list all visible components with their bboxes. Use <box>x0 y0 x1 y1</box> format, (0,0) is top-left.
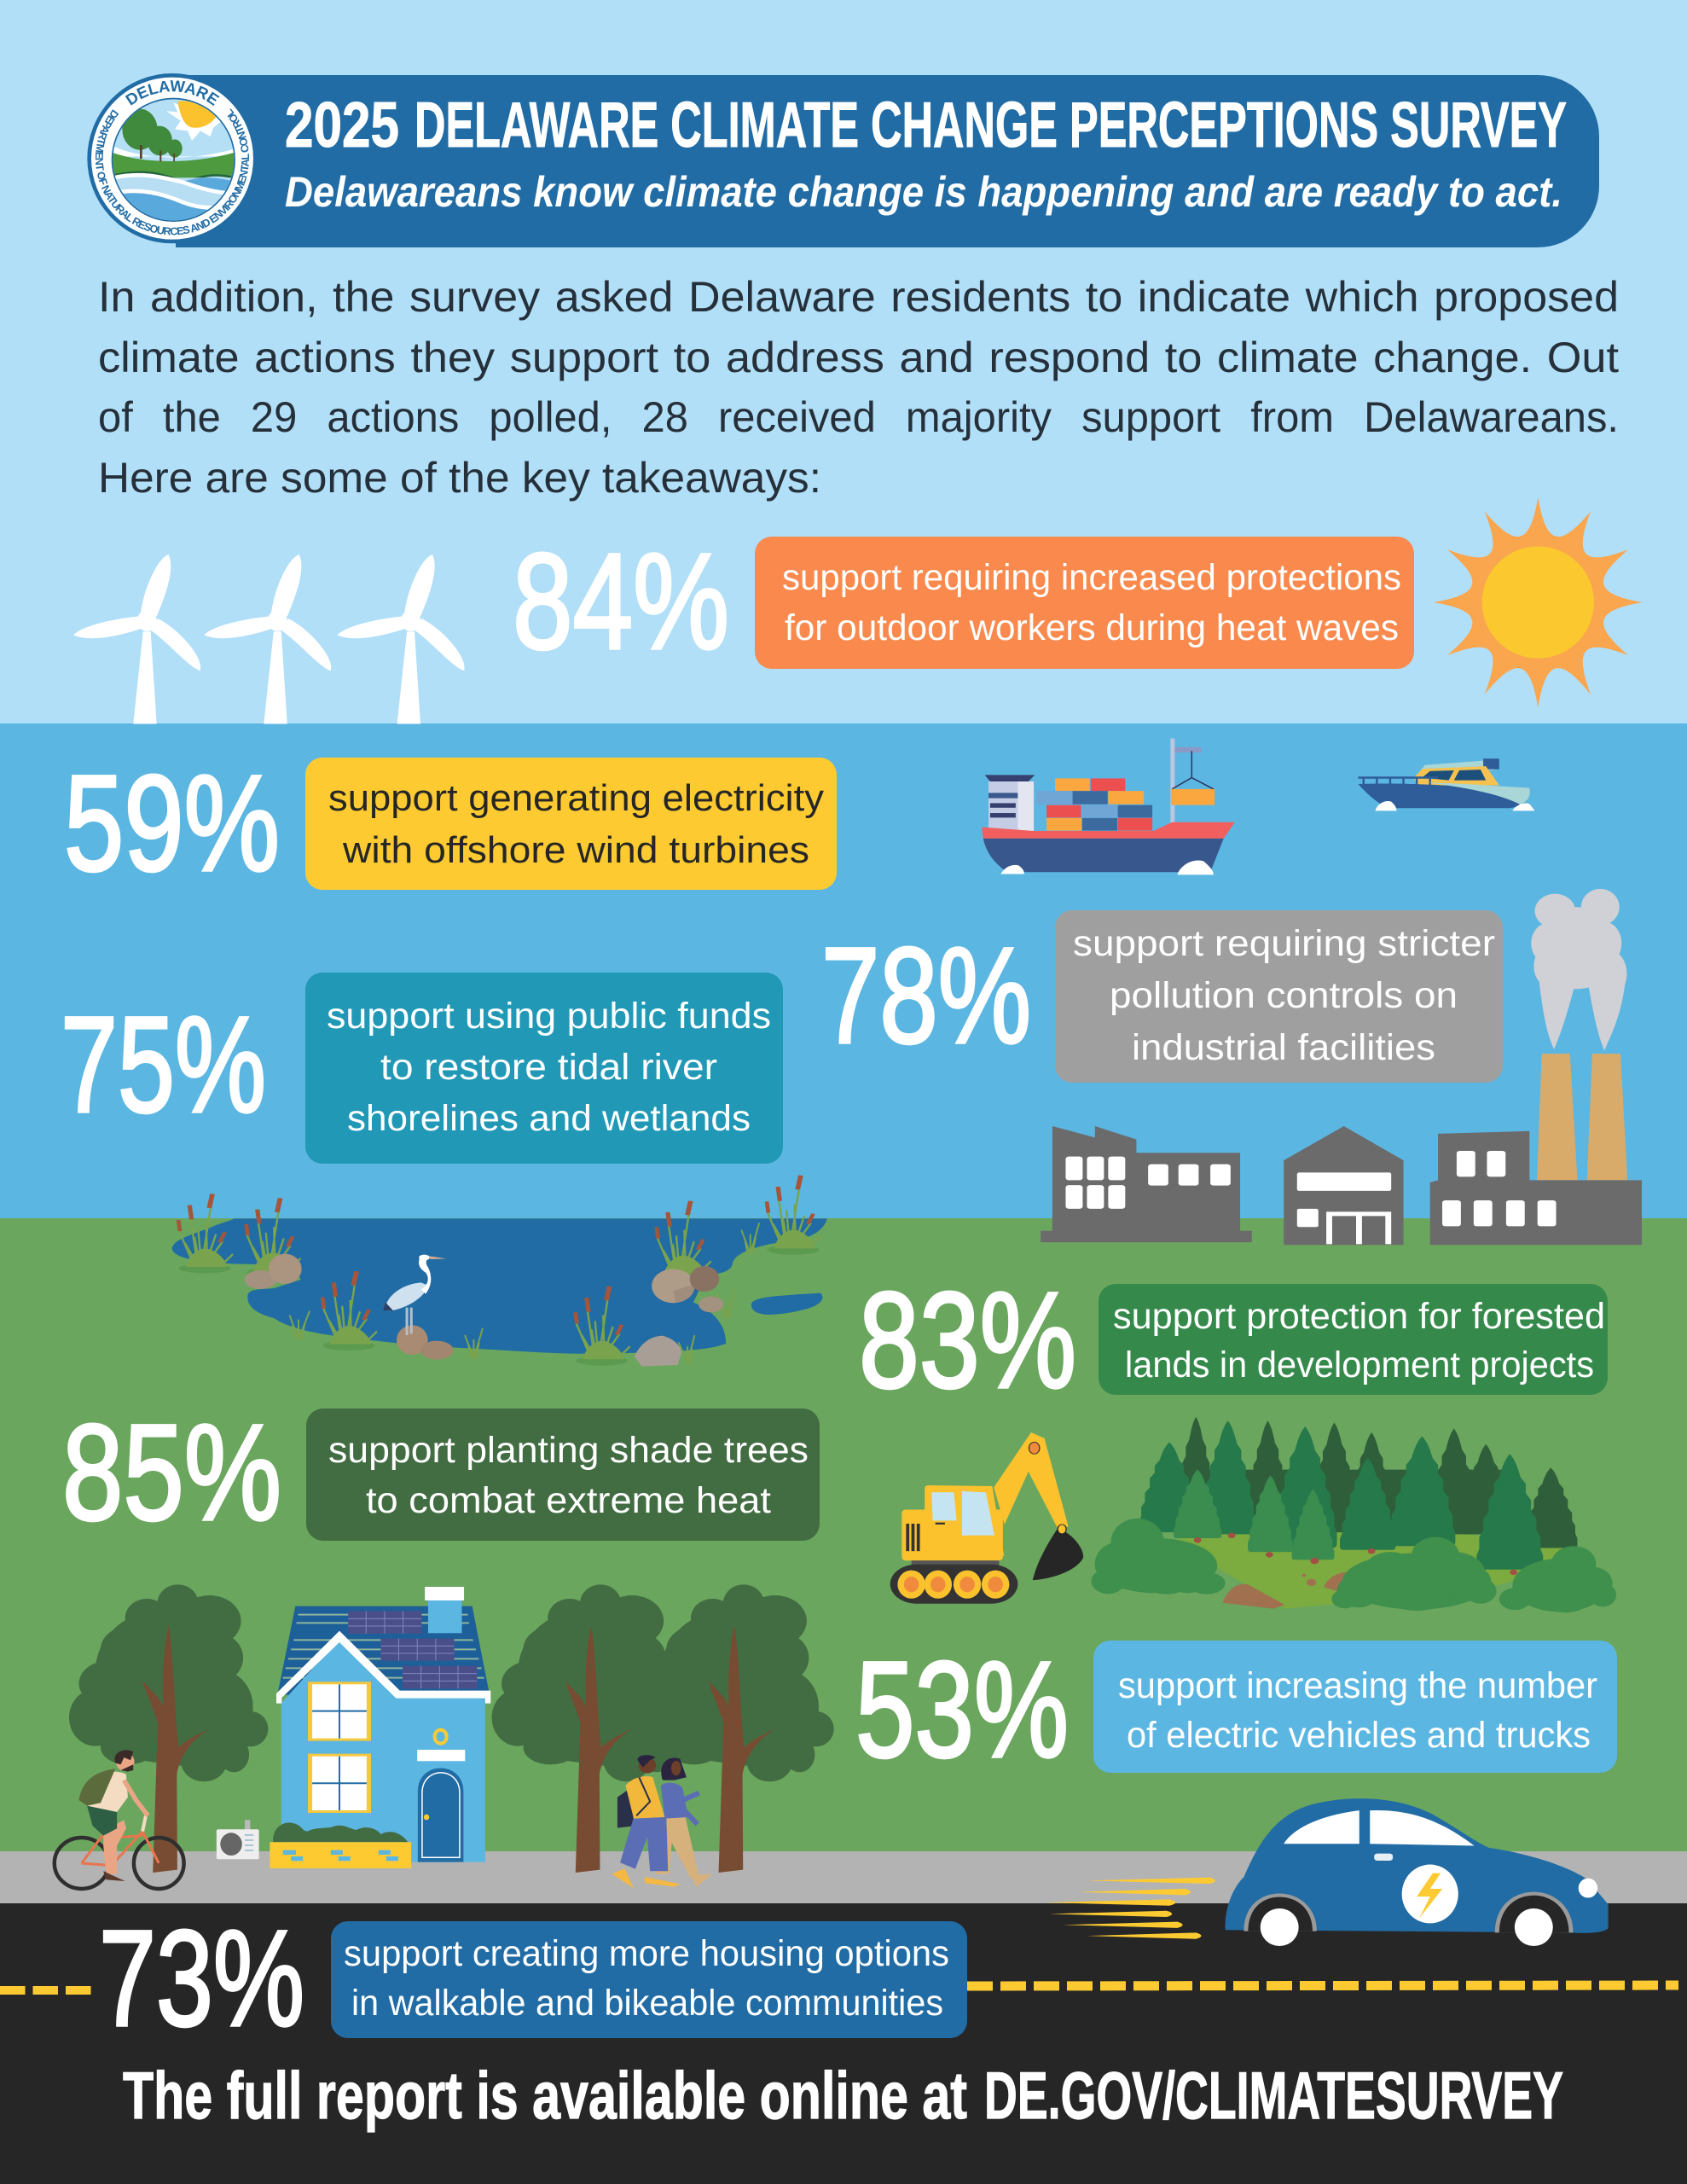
callout: forested lands <box>1099 1284 1608 1395</box>
icon: electric car with speed lines <box>1045 1798 1609 1946</box>
background: sidewalk band <box>0 1851 1687 1904</box>
windows <box>308 1682 371 1813</box>
background: grass band <box>0 1218 1687 1852</box>
solar panels <box>348 1611 477 1688</box>
stat: 84%: 84% <box>513 525 729 677</box>
illustration: house with solar panels <box>270 1587 490 1868</box>
callout: electric vehicles: support increasing the number <box>1118 1665 1597 1706</box>
clearing <box>1172 1530 1571 1609</box>
walls <box>281 1640 485 1862</box>
callout: offshore wind: with offshore wind turbines <box>342 829 809 871</box>
icon: wind turbines <box>73 555 465 723</box>
callout: tidal shorelines <box>305 973 783 1164</box>
shrubs <box>1091 1519 1616 1612</box>
intro paragraph: of the 29 actions polled, 28 received majority support from Delawareans. <box>98 393 1619 441</box>
icon: sun <box>1434 497 1643 707</box>
woman <box>656 1757 713 1887</box>
factory building left <box>1041 1126 1252 1242</box>
callout: pollution controls: pollution controls on <box>1110 975 1458 1016</box>
chimney <box>425 1587 464 1633</box>
callout: shade trees: to combat extreme heat <box>366 1480 771 1521</box>
footer call to action: The full report is available online at <box>123 2058 967 2133</box>
icon: factories with smokestacks <box>1041 889 1642 1245</box>
roof <box>277 1606 490 1695</box>
small grass tufts <box>290 1223 759 1364</box>
subtitle: Delawareans know climate change is happening and are ready to act. <box>285 168 1562 216</box>
icon: excavator <box>890 1432 1083 1604</box>
mid conifers <box>1139 1420 1543 1570</box>
background: sky band <box>0 0 1687 724</box>
stat: 53%: 53% <box>855 1633 1069 1786</box>
illustration: couple walking <box>612 1755 713 1888</box>
back conifers <box>1174 1417 1577 1548</box>
stat: 75%: 75% <box>61 988 266 1141</box>
callout: electric vehicles: of electric vehicles and trucks <box>1127 1715 1591 1756</box>
stat: 73%: 73% <box>99 1902 304 2054</box>
white trim <box>276 1631 490 1704</box>
man <box>612 1755 680 1888</box>
callout: walkable housing: in walkable and bikeable communities <box>351 1983 943 2024</box>
callout: forested lands: support protection for forested <box>1113 1296 1605 1337</box>
logo: DNREC seal: DELAWARE <box>125 80 220 106</box>
illustration: trees <box>69 1584 834 1873</box>
charge badge <box>1402 1865 1458 1923</box>
intro paragraph: climate actions they support to address and respond to climate change. Out <box>98 334 1619 381</box>
car windows <box>1284 1810 1474 1845</box>
callout: outdoor workers: support requiring increased protections <box>782 557 1401 598</box>
stat: 78%: 78% <box>821 919 1031 1072</box>
illustration: forest <box>1091 1417 1616 1612</box>
stat: 59%: 59% <box>64 746 280 899</box>
rocks <box>245 1254 723 1367</box>
callout: walkable housing <box>331 1921 967 2038</box>
pond water <box>172 1218 827 1354</box>
callout: pollution controls: support requiring stricter <box>1073 923 1495 964</box>
icon: heat pump unit <box>217 1820 259 1859</box>
callout: tidal shorelines: shorelines and wetlands <box>347 1098 751 1139</box>
front conifers <box>1174 1470 1334 1560</box>
planter <box>270 1822 411 1868</box>
smokestacks <box>1537 1054 1627 1180</box>
callout: offshore wind: support generating electricity <box>328 777 824 819</box>
road lane markings <box>0 1985 1678 1990</box>
reed clusters <box>177 1176 821 1366</box>
intro paragraph: In addition, the survey asked Delaware residents to indicate which proposed <box>98 273 1619 321</box>
icon: container ship <box>982 739 1235 874</box>
header banner <box>176 75 1599 247</box>
callout: outdoor workers <box>755 537 1414 669</box>
callout: walkable housing: support creating more housing options <box>344 1933 949 1974</box>
callout: pollution controls: industrial facilities <box>1132 1027 1435 1068</box>
heron <box>383 1255 447 1335</box>
car body <box>1225 1798 1609 1933</box>
stat: 83%: 83% <box>859 1263 1076 1416</box>
callout: forested lands: lands in development projects <box>1125 1345 1594 1385</box>
background: road band <box>0 1903 1687 2184</box>
callout: offshore wind <box>305 758 837 890</box>
warehouse middle <box>1284 1126 1404 1245</box>
callout: tidal shorelines: to restore tidal river <box>380 1047 717 1088</box>
logo: DNREC seal: DEPARTMENT OF NATURAL RESOURCES AND ENVIRONMENTAL CONTROL <box>96 108 249 235</box>
factory building right <box>1430 1131 1642 1245</box>
soil mounds <box>1222 1572 1355 1609</box>
title: 2025 <box>285 89 399 160</box>
intro paragraph: Here are some of the key takeaways: <box>98 454 821 502</box>
intro paragraph <box>98 273 1619 502</box>
wheels <box>1244 1892 1573 1946</box>
callout: outdoor workers: for outdoor workers during heat waves <box>785 607 1399 648</box>
callout: pollution controls <box>1055 910 1503 1083</box>
background: water band <box>0 723 1687 1219</box>
callout: tidal shorelines: support using public funds <box>327 996 771 1037</box>
stat: 85%: 85% <box>62 1396 281 1548</box>
speed lines <box>1045 1878 1215 1939</box>
illustration: cyclist <box>55 1750 184 1889</box>
smoke <box>1531 889 1626 1051</box>
icon: motor yacht <box>1359 758 1535 810</box>
illustration: wetland pond with heron <box>172 1176 827 1367</box>
door <box>417 1730 465 1862</box>
callout: shade trees: support planting shade trees <box>328 1430 809 1471</box>
callout: electric vehicles <box>1093 1641 1617 1773</box>
callout: shade trees <box>306 1409 820 1541</box>
